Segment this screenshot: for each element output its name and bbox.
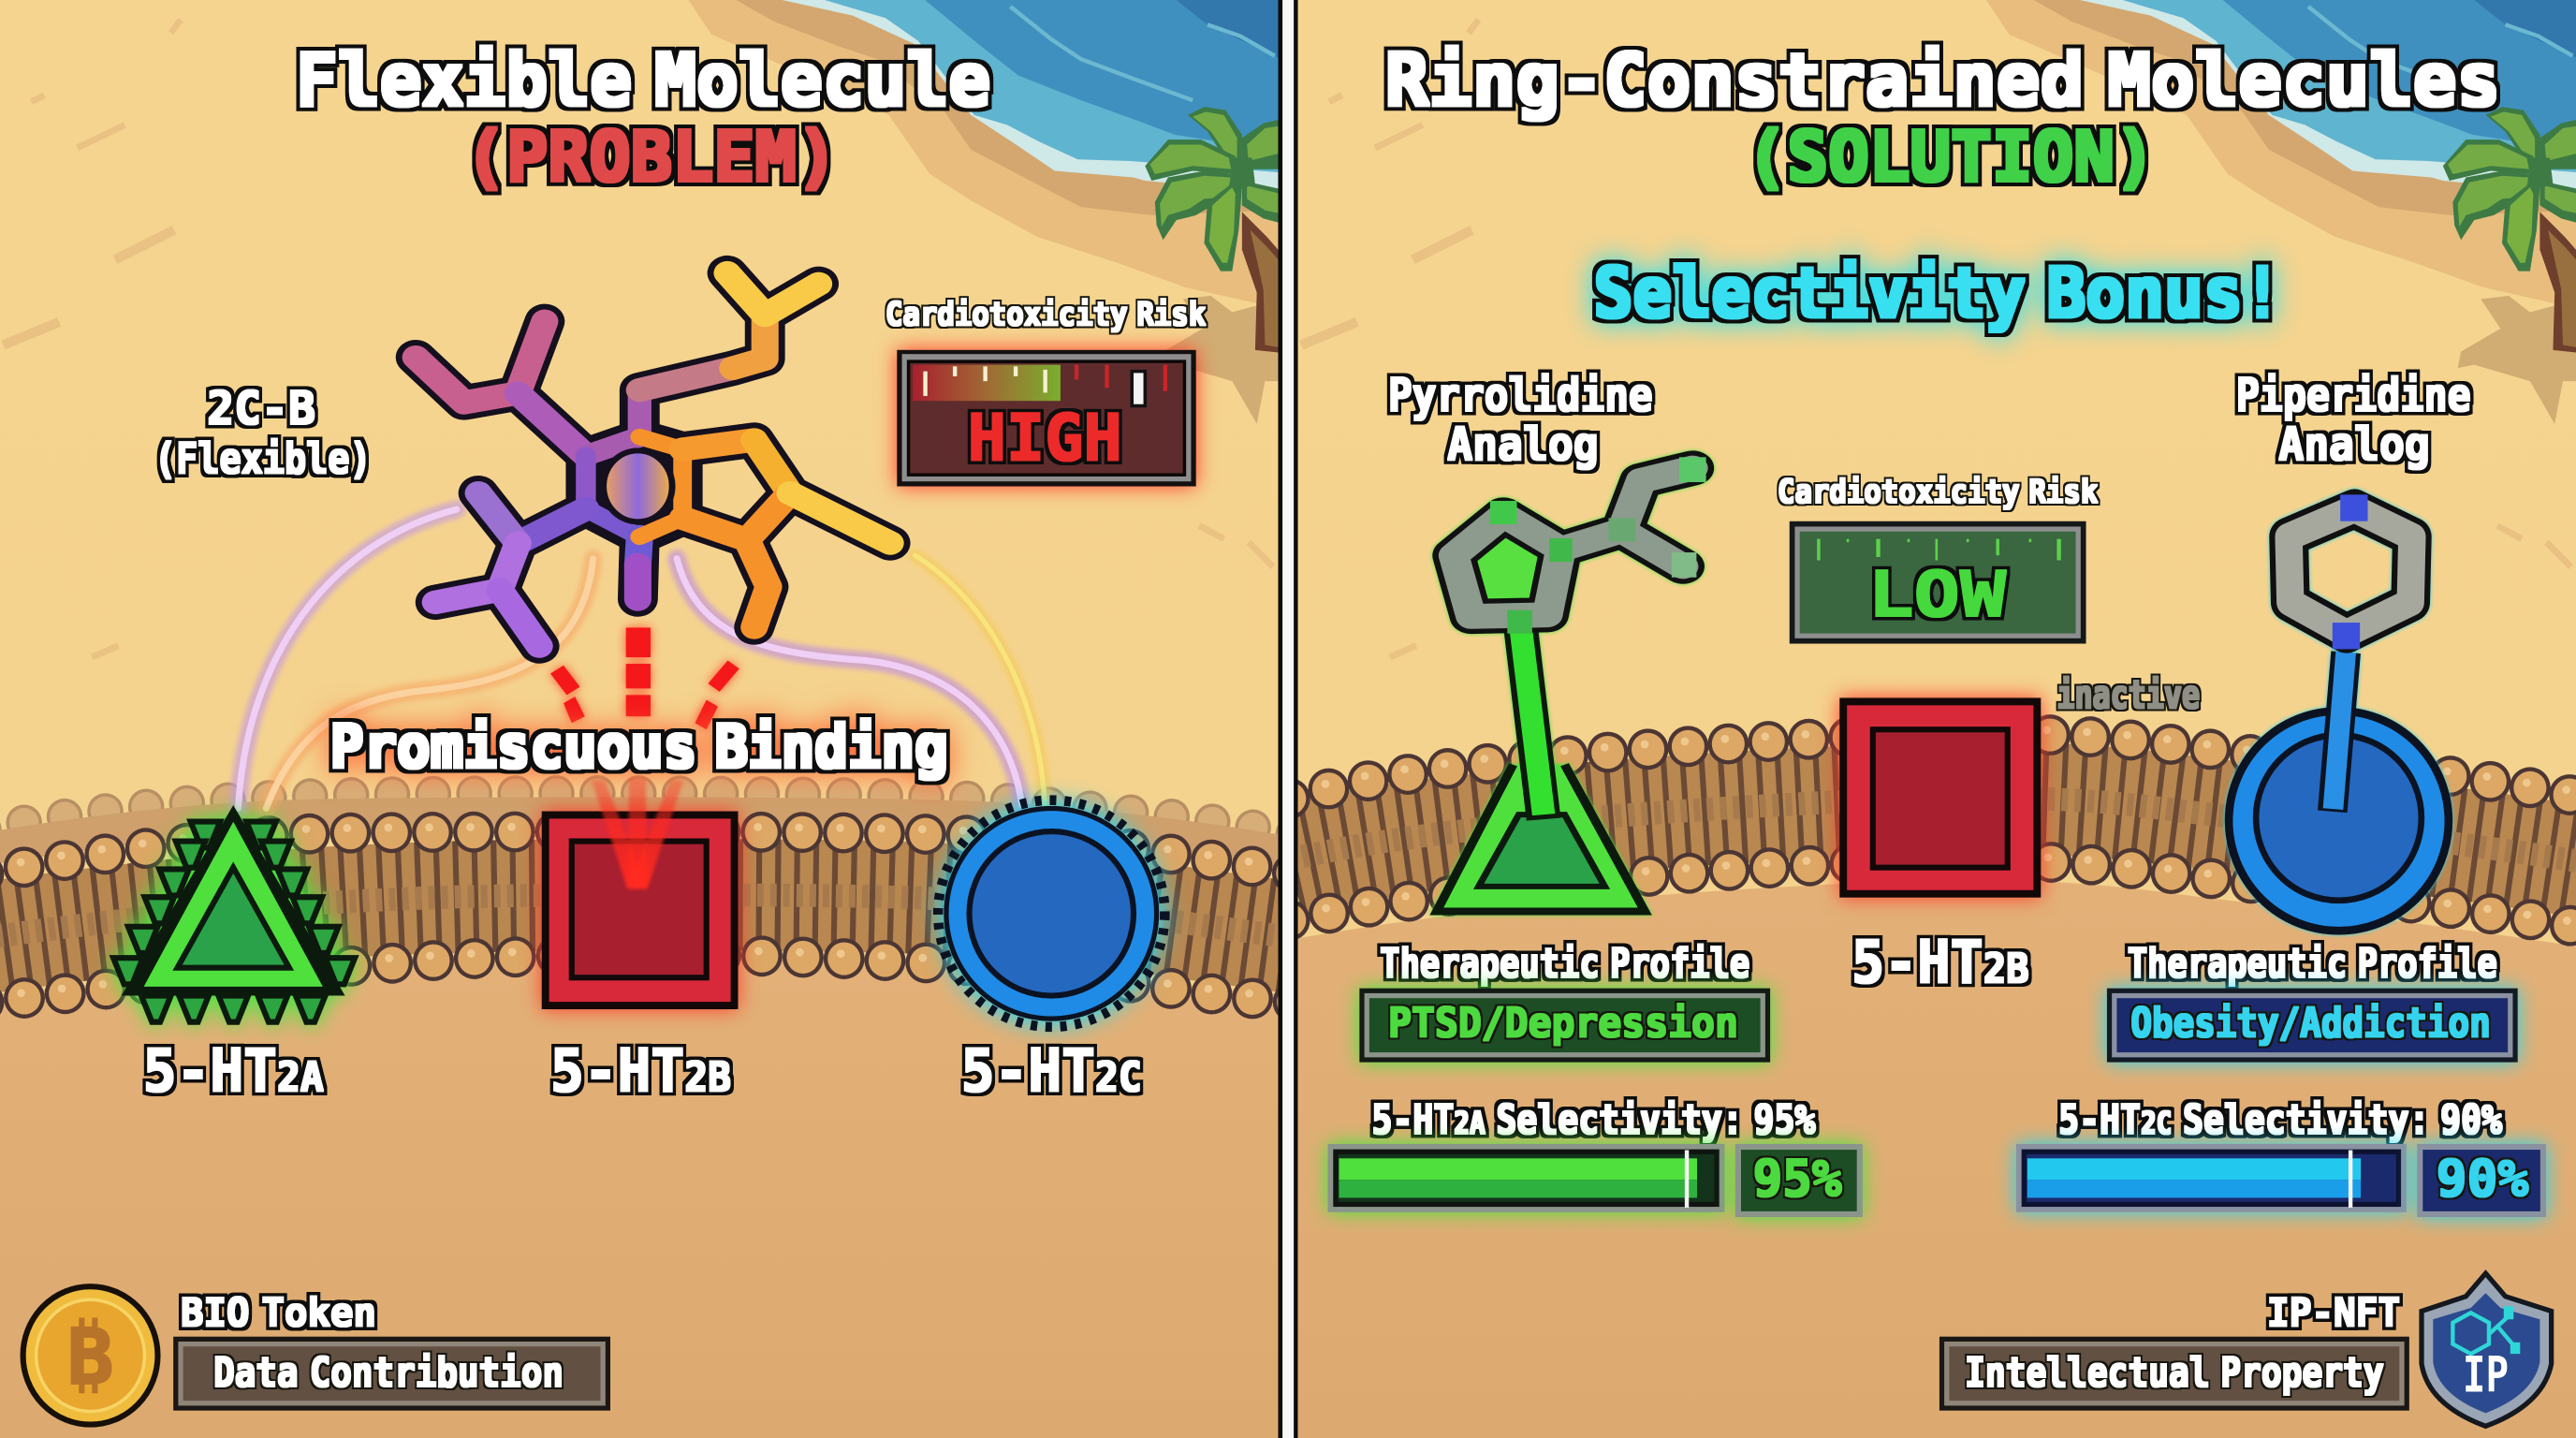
gauge value: HIGH: HIGH [968, 401, 1122, 476]
panel: ring-constrained molecules (solution) [1286, 0, 2576, 1438]
label: Pyrrolidine Analog [1388, 368, 1653, 471]
pill: Data Contribution: Data Contribution [213, 1349, 564, 1397]
label: IP-NFT: IP-NFT [2267, 1289, 2400, 1335]
label: inactive: inactive [2056, 671, 2200, 717]
bar: 5-HT2A selectivity 95% [1331, 1147, 1721, 1210]
value box: 95% [1738, 1147, 1860, 1214]
divider between panels [1278, 0, 1298, 1438]
pill: Intellectual Property: Intellectual Property [1965, 1349, 2384, 1397]
receptor and ligand: pyrrolidine on 5-HT2A [1437, 457, 1706, 912]
panel: flexible molecule (problem) [0, 0, 1298, 1438]
icon: IP shield [2422, 1273, 2552, 1426]
label: Pyrrolidine Analog: Pyrrolidine [1388, 368, 1653, 422]
label: 2C-B flexible: 2C-B [207, 381, 315, 435]
receptor triangle [1437, 765, 1645, 912]
pill: Obesity/Addiction [2110, 990, 2515, 1060]
receptor: 5-HT2C circle [938, 800, 1164, 1027]
label: 5-HT2B: 5-HT2B [550, 1035, 731, 1105]
subtitle: problem: (PROBLEM) [465, 118, 838, 198]
gauge: high risk [897, 350, 1196, 486]
binding arcs to receptors [238, 509, 1045, 808]
label: Piperidine Analog: Piperidine [2236, 368, 2471, 422]
subtitle: solution: (SOLUTION) [1747, 118, 2156, 198]
label: 5-HT2C: 5-HT2C [961, 1035, 1142, 1105]
label: 5-HT2A: 5-HT2A [143, 1035, 324, 1105]
heading: Selectivity Bonus: Selectivity Bonus! [1593, 255, 2282, 334]
piperidine molecule [2289, 494, 2412, 812]
receptor and ligand: piperidine on 5-HT2C [2229, 494, 2449, 931]
lipid membrane [0, 793, 1298, 1438]
icon: IP shield: IP [2463, 1347, 2509, 1404]
bar: 5-HT2C selectivity 90% [2019, 1147, 2404, 1210]
label: 5-HT2A selectivity: 5-HT2A Selectivity: 95% [1372, 1096, 1816, 1144]
pill: Data Contribution [176, 1339, 607, 1408]
label: Piperidine Analog: Analog [2278, 417, 2430, 471]
value box: 90% [2420, 1147, 2543, 1214]
value box: 90%: 90% [2437, 1150, 2528, 1209]
gauge value: LOW: LOW [1868, 558, 2007, 631]
value box: 95%: 95% [1753, 1150, 1842, 1209]
background: beach scene with sea and palm [2, 0, 1279, 660]
pill: Obesity/Addiction: Obesity/Addiction [2130, 999, 2491, 1047]
label: therapeutic profile right: Therapeutic Profile [2128, 940, 2497, 988]
title: Ring-Constrained Molecules: Ring-Constrained Molecules [1385, 38, 2500, 123]
pill: Intellectual Property [1942, 1339, 2407, 1408]
background: beach scene with sea and palm [1298, 0, 2576, 1438]
label: 2C-B flexible: (Flexible) [154, 433, 372, 483]
label: 5-HT2B: 5-HT2B [1852, 928, 2029, 997]
icon: BIO token coin [23, 1286, 157, 1425]
gauge: low risk [1793, 524, 2083, 640]
label: Pyrrolidine Analog: Analog [1447, 417, 1599, 471]
molecule: 2C-B [416, 273, 890, 646]
receptor: 5-HT2B square [546, 814, 735, 1005]
receptor circle [2229, 711, 2449, 931]
label: 2C-B flexible [154, 381, 372, 483]
cardiotoxicity risk label: Cardiotoxicity Risk [886, 295, 1206, 333]
label: BIO Token: BIO Token [181, 1289, 376, 1335]
heading: Promiscuous Binding: Promiscuous Binding [330, 712, 948, 782]
receptor: 5-HT2B square inactive [1843, 701, 2037, 894]
pyrrolidine molecule [1454, 457, 1706, 819]
lipid membrane [1286, 729, 2576, 1438]
label: 5-HT2C selectivity: 5-HT2C Selectivity: 90% [2058, 1096, 2503, 1144]
cardiotoxicity risk label: Cardiotoxicity Risk [1778, 473, 2098, 511]
pill: PTSD/Depression [1362, 990, 1767, 1060]
title: Flexible Molecule: Flexible Molecule [296, 38, 990, 123]
red binding fan into 5-HT2B [592, 777, 683, 888]
icon: BIO token coin: B [67, 1314, 113, 1402]
label: Piperidine Analog [2236, 368, 2471, 471]
receptor: 5-HT2A triangle [113, 805, 355, 1022]
pill: PTSD/Depression: PTSD/Depression [1388, 999, 1738, 1047]
red dashes: binding to 5-HT2B [550, 627, 739, 729]
label: therapeutic profile left: Therapeutic Profile [1380, 940, 1749, 988]
